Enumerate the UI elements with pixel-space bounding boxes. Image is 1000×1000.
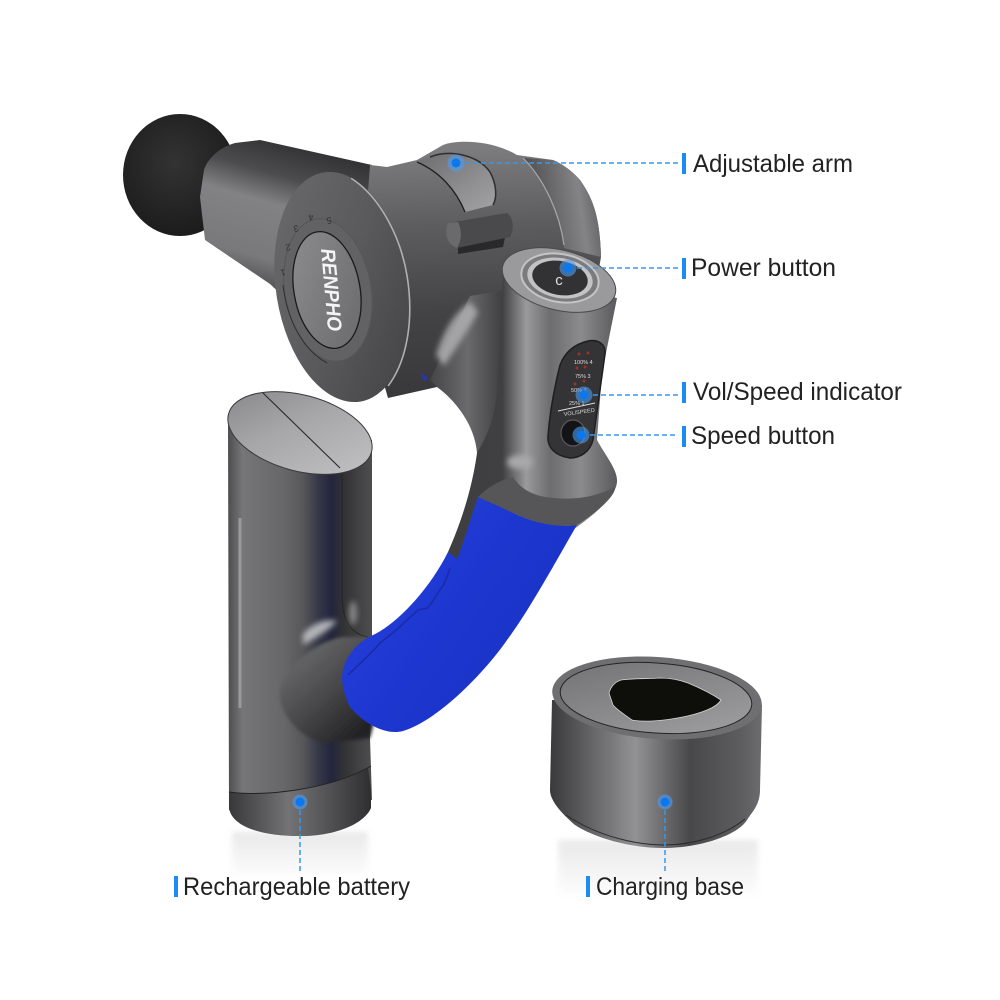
battery side slot bbox=[238, 518, 242, 708]
speed scale numbers: 5 bbox=[326, 215, 332, 226]
leader line bbox=[299, 810, 301, 872]
label bar bbox=[682, 382, 686, 403]
indicator panel bbox=[548, 341, 605, 458]
seam pocket highlight bbox=[349, 601, 357, 625]
label bar bbox=[586, 876, 590, 897]
label text: Adjustable arm bbox=[693, 150, 853, 178]
battery body bbox=[228, 425, 372, 810]
lip highlight bbox=[507, 455, 533, 469]
head barrel bbox=[200, 140, 400, 340]
label bar bbox=[174, 876, 178, 897]
slot upper edge bbox=[430, 153, 496, 205]
power button bbox=[517, 248, 603, 308]
logo text: RENPHO bbox=[316, 248, 345, 333]
indicator labels: 100% 4 bbox=[574, 360, 593, 366]
callout: rechargeable battery bbox=[174, 794, 410, 901]
callout marker bbox=[658, 794, 672, 810]
battery top seam bbox=[263, 393, 340, 468]
label text: Rechargeable battery bbox=[183, 873, 410, 901]
arm housing body bbox=[360, 142, 601, 398]
lower handle and grey strip bbox=[448, 275, 617, 570]
lower lip shading bbox=[478, 477, 615, 526]
leader line bbox=[593, 394, 678, 396]
handle top cap bbox=[495, 237, 623, 323]
leader line bbox=[664, 810, 666, 872]
speed scale numbers: 4 bbox=[308, 212, 314, 223]
red leds bbox=[574, 352, 590, 386]
blue sliver under disc bbox=[420, 372, 428, 382]
callout marker bbox=[572, 426, 590, 444]
base body bbox=[550, 700, 762, 848]
battery vertical seam bbox=[342, 470, 368, 637]
callout marker bbox=[448, 154, 464, 172]
arm latch bbox=[446, 213, 513, 254]
speed button knob bbox=[561, 420, 585, 446]
battery top bbox=[219, 377, 381, 489]
arm right section bbox=[523, 158, 601, 257]
base chamfer line bbox=[566, 815, 745, 845]
battery cap seam bbox=[229, 766, 371, 794]
upper handle bbox=[478, 237, 623, 526]
callout marker bbox=[560, 260, 576, 276]
logo plate bbox=[284, 226, 370, 354]
arm seam lines bbox=[417, 162, 465, 212]
blue silicone grip bbox=[342, 497, 577, 732]
dome bright streak bbox=[303, 620, 337, 645]
leader line bbox=[590, 434, 678, 436]
callout marker bbox=[576, 386, 592, 404]
arm light seam bbox=[523, 158, 564, 245]
vol speed caption: VOL/SPEED bbox=[563, 408, 595, 418]
scale arc bbox=[283, 285, 327, 363]
battery bottom cap bbox=[229, 768, 371, 836]
neck under handle bbox=[430, 290, 505, 453]
reflection under charging base bbox=[558, 840, 758, 900]
indicator panel: 75% 3 bbox=[575, 374, 591, 380]
callout: vol speed indicator bbox=[576, 378, 902, 406]
label bar bbox=[682, 258, 686, 279]
label text: Vol/Speed indicator bbox=[693, 378, 902, 406]
label text: Power button bbox=[691, 254, 836, 282]
callout: speed button bbox=[572, 422, 835, 450]
callout: adjustable arm bbox=[448, 150, 853, 178]
callout: power button bbox=[560, 254, 836, 282]
speed scale numbers: 3 bbox=[293, 223, 299, 234]
speed scale numbers: 2 bbox=[285, 242, 291, 253]
leader line bbox=[465, 162, 678, 164]
connector dome bbox=[280, 637, 380, 743]
triangular charging socket bbox=[609, 678, 721, 721]
label text: Charging base bbox=[596, 873, 744, 901]
side disc bbox=[259, 162, 425, 412]
rechargeable battery handle bbox=[219, 377, 381, 836]
label bar bbox=[682, 153, 686, 174]
charging base bbox=[549, 650, 765, 848]
indicator panel: 50% 2 bbox=[571, 388, 587, 394]
reflection under battery bbox=[232, 832, 368, 880]
base top rim bbox=[549, 650, 765, 746]
callout marker bbox=[292, 794, 308, 810]
speed scale numbers: 1 bbox=[280, 267, 286, 278]
speed scale numbers bbox=[280, 212, 332, 278]
indicator divider bbox=[558, 403, 595, 411]
base top face bbox=[558, 656, 754, 740]
indicator panel: 25% 1 bbox=[569, 401, 585, 407]
label bar bbox=[682, 426, 686, 447]
icon: black massage ball bbox=[123, 114, 237, 236]
massage gun head bbox=[123, 114, 601, 412]
grip seam detail bbox=[348, 568, 450, 675]
neck highlight bbox=[436, 302, 478, 366]
logo surround ring bbox=[273, 212, 383, 368]
label text: Speed button bbox=[691, 422, 835, 450]
arm inner cylinder slot bbox=[417, 153, 496, 212]
callout: charging base bbox=[586, 794, 744, 901]
icon: power glyph: c bbox=[555, 272, 563, 289]
disc rim highlight bbox=[351, 172, 424, 387]
leader line bbox=[577, 267, 678, 269]
